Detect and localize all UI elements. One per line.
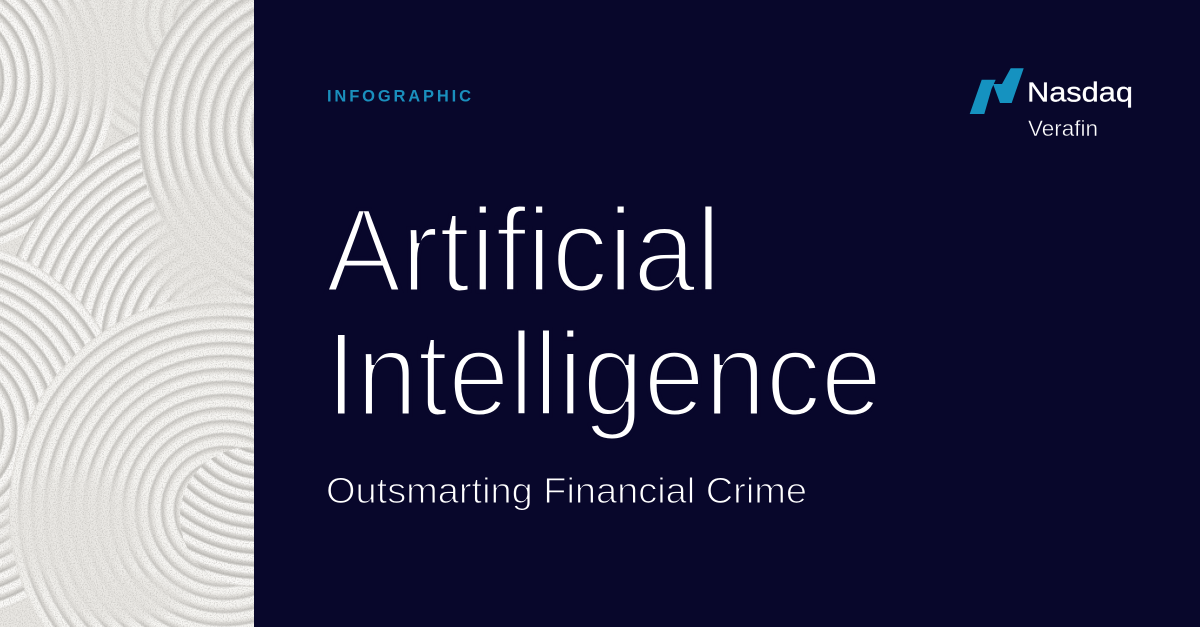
label: infographic: INFOGRAPHIC	[327, 88, 471, 106]
title: Artificial Intelligence: Artificial	[326, 184, 721, 318]
title: Artificial Intelligence: Intelligence	[326, 308, 882, 442]
logo: Nasdaq Verafin	[970, 68, 1133, 141]
subtitle: Outsmarting Financial Crime	[326, 470, 807, 511]
logo wordmark: Nasdaq: Nasdaq	[1027, 76, 1133, 108]
panel: raked sand texture	[0, 0, 254, 627]
logo wordmark: Verafin: Verafin	[1028, 116, 1098, 141]
title: Artificial Intelligence	[326, 184, 882, 442]
icon: Nasdaq mark	[970, 68, 1024, 114]
